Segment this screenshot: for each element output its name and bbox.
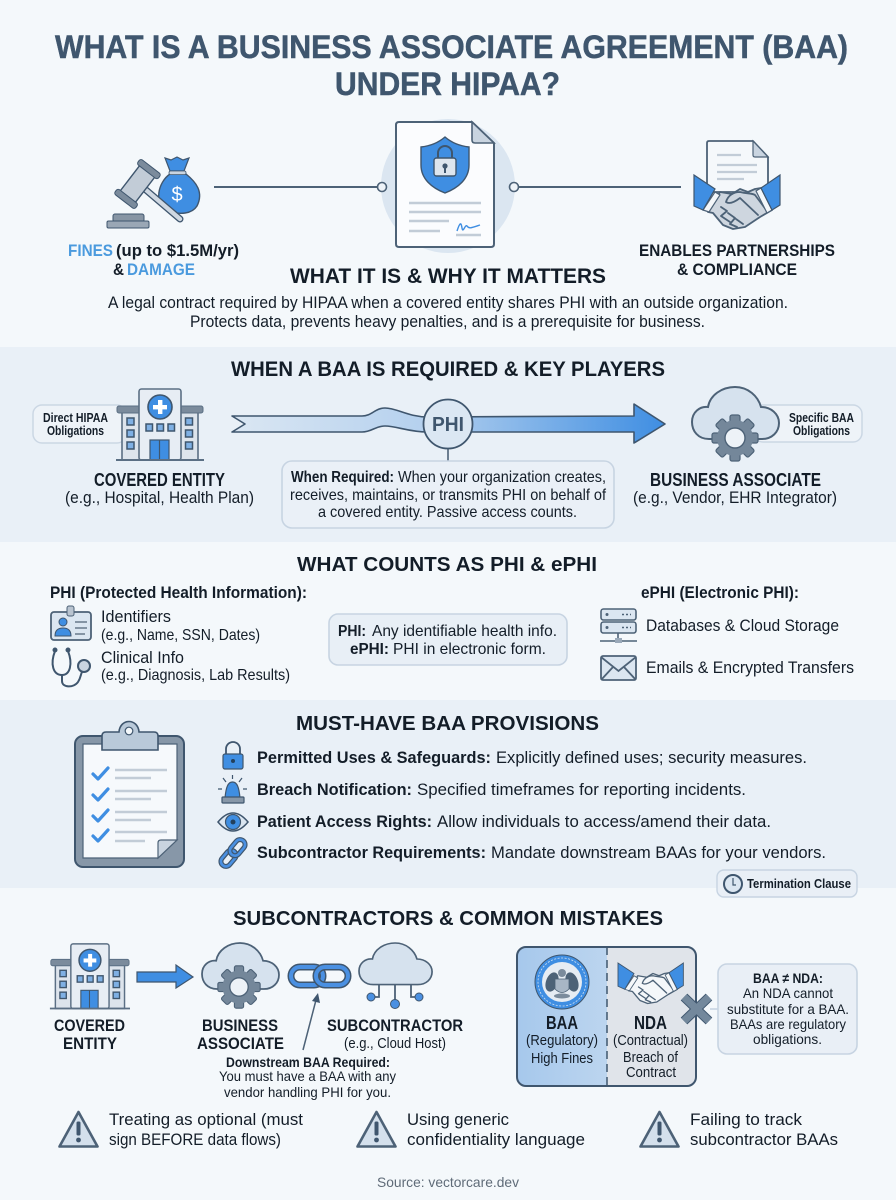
icon: envelope [601,656,636,680]
provision: subcontractor requirements: Subcontractor Requirements: [257,843,486,862]
provision: permitted uses: Permitted Uses & Safeguards: [257,748,491,767]
panel: what counts as PHI and ePHI [50,553,854,686]
icon: gavel and money bag [107,157,200,228]
text: emails: Emails & Encrypted Transfers [646,659,854,677]
arrow: downstream pointer [303,993,320,1050]
label: business associate: (e.g., Vendor, EHR Integrator) [633,488,837,507]
label: business associate [633,470,837,507]
label: business associate: BUSINESS ASSOCIATE [650,470,821,490]
icon: gavel and money bag: $ [172,184,183,206]
label: subcontractor: (e.g., Cloud Host) [344,1036,446,1052]
callout: BAA does not equal NDA: BAAs are regulatory [730,1016,846,1032]
label: fines and damage [68,241,239,279]
icon: PHI node [424,400,472,461]
text: BAA column: (Regulatory) [526,1033,598,1049]
label: covered entity: ENTITY [63,1034,118,1053]
callout: BAA does not equal NDA: BAA ≠ NDA: [753,970,823,986]
label: fines and damage: FINES [68,241,113,260]
text: clinical info: Clinical Info [101,649,184,667]
label: enables partnerships and compliance: ENABLES PARTNERSHIPS [639,241,835,260]
provision: patient access rights: Allow individuals to access/amend their data. [437,812,771,831]
label: enables partnerships and compliance [639,241,835,279]
text: clinical info: (e.g., Diagnosis, Lab Results) [101,667,290,684]
icon: stethoscope [53,648,90,686]
mistake: treating as optional [60,1110,303,1149]
provision: subcontractor requirements [257,843,826,862]
title: UNDER HIPAA? [335,66,560,102]
icon: ID badge [51,606,91,640]
text: NDA column: NDA [634,1012,667,1033]
heading: must-have provisions: MUST-HAVE BAA PROVISIONS [296,712,599,735]
panel: what it is and why it matters [68,119,835,331]
panel: BAA versus NDA comparison [517,947,709,1086]
callout: BAA does not equal NDA [710,964,857,1054]
callout: definitions: ePHI: [350,641,389,658]
label: fines and damage: DAMAGE [127,260,195,279]
provision: breach notification: Breach Notification: [257,780,412,799]
icon: X mark [684,997,709,1021]
provision: patient access rights [257,812,771,831]
provision: subcontractor requirements: Mandate downstream BAAs for your vendors. [491,843,826,862]
callout: when required: receives, maintains, or transmits PHI on behalf of [290,487,607,504]
arrow: PHI flow [232,404,665,443]
provision: patient access rights: Patient Access Rights: [257,812,432,831]
icon: chain link [291,967,348,985]
icon: NDA handshake [618,963,683,1004]
callout: direct HIPAA obligations [33,405,126,443]
panel: must-have BAA provisions [0,700,896,897]
provision: breach notification: Specified timeframes for reporting incidents. [417,780,746,799]
mistake: generic language: Using generic [407,1110,509,1129]
icon: covered entity hospital [50,944,130,1009]
callout: BAA does not equal NDA: obligations. [753,1031,822,1047]
connector: left [214,182,386,192]
callout: specific BAA obligations [754,405,862,442]
icon: alarm beacon [218,775,247,803]
label: covered entity: (e.g., Hospital, Health Plan) [65,488,254,507]
text: identifiers: (e.g., Name, SSN, Dates) [101,627,260,644]
text: downstream BAA required: You must have a BAA with any [219,1068,396,1084]
text: BAA definition: Protects data, prevents heavy penalties, and is a prerequisite for business. [190,312,705,331]
subheading: PHI: PHI (Protected Health Information): [50,583,307,602]
mistake: treating as optional: Treating as optional (must [109,1110,303,1129]
text: BAA column: BAA [546,1012,578,1033]
mistake: generic language: confidentiality language [407,1130,585,1149]
callout: definitions: PHI: [338,623,366,640]
label: business associate: BUSINESS [202,1016,278,1035]
text: BAA definition [108,293,788,331]
text: clinical info [101,649,290,684]
callout: direct HIPAA obligations: Obligations [47,423,104,438]
icon: padlock [223,742,243,769]
icon: hospital [116,389,204,460]
label: subcontractor [327,1016,463,1052]
callout: when required: a covered entity. Passive access counts. [318,504,577,521]
heading: when a BAA is required: WHEN A BAA IS REQUIRED & KEY PLAYERS [231,357,665,381]
icon: business associate cloud and gear [692,387,779,461]
icon: cloud and gear [202,943,279,1008]
mistake: untracked subcontractors [640,1110,838,1149]
mistake: generic language [358,1110,585,1149]
callout: termination clause: Termination Clause [747,877,851,891]
mistake: untracked subcontractors: subcontractor BAAs [690,1130,838,1149]
callout: termination clause [717,870,857,897]
label: covered entity: COVERED ENTITY [94,470,225,490]
source line: Source: vectorcare.dev [377,1174,519,1190]
arrow: covered entity to business associate [137,965,193,988]
icon: BAA document with shield [381,119,515,253]
icon: server [600,609,637,643]
text: BAA column [526,1012,598,1067]
callout: definitions: Any identifiable health info. [372,623,557,640]
panel: subcontractors and common mistakes [50,907,857,1190]
label: subcontractor: SUBCONTRACTOR [327,1016,463,1035]
label: fines and damage: (up to $1.5M/yr) [116,241,239,260]
mistake: untracked subcontractors: Failing to track [690,1110,803,1129]
provision: breach notification [257,780,746,799]
icon: eye [218,813,248,831]
icon: subcontractor cloud network [359,943,432,1008]
provision: permitted uses: Explicitly defined uses; security measures. [496,748,807,767]
callout: when required [282,461,614,528]
connector: right [510,182,681,192]
label: business associate [197,1016,284,1053]
text: NDA column: (Contractual) [613,1033,688,1049]
title: WHAT IS A BUSINESS ASSOCIATE AGREEMENT (BAA) [55,29,848,65]
callout: when required: When Required: [291,469,394,486]
callout: when required: When your organization creates, [398,469,606,486]
label: covered entity: COVERED [54,1016,125,1035]
callout: BAA does not equal NDA: substitute for a BAA. [727,1001,849,1017]
text: downstream BAA required [219,1054,396,1100]
text: BAA definition: A legal contract required by HIPAA when a covered entity shares PHI with an outside organization. [108,293,788,312]
heading: what counts as PHI: WHAT COUNTS AS PHI & ePHI [297,553,597,576]
callout: BAA does not equal NDA: An NDA cannot [743,985,833,1001]
label: covered entity [65,470,254,507]
panel: when a BAA is required and key players [0,347,896,542]
text: NDA column: Contract [626,1065,676,1081]
heading: what it is and why it matters: WHAT IT IS & WHY IT MATTERS [290,265,606,288]
subheading: ePHI: ePHI (Electronic PHI): [641,583,799,602]
label: fines and damage: & [113,260,124,279]
title [55,29,848,102]
text: NDA column: Breach of [623,1050,679,1066]
icon: clipboard checklist [75,722,184,867]
callout: specific BAA obligations: Specific BAA [789,410,854,425]
text: identifiers [101,608,260,644]
label: business associate: ASSOCIATE [197,1034,284,1053]
callout: direct HIPAA obligations: Direct HIPAA [43,410,108,425]
text: downstream BAA required: Downstream BAA Required: [226,1054,390,1070]
label: enables partnerships and compliance: & COMPLIANCE [677,260,797,279]
mistake: treating as optional: sign BEFORE data flows) [109,1130,281,1149]
text: NDA column [613,1012,688,1081]
text: databases: Databases & Cloud Storage [646,617,839,635]
icon: contract with handshake [694,141,780,229]
icon: PHI node: PHI [432,414,464,436]
callout: definitions [329,614,567,665]
heading: subcontractors: SUBCONTRACTORS & COMMON MISTAKES [233,907,663,930]
text: downstream BAA required: vendor handling PHI for you. [224,1084,391,1100]
text: BAA column: High Fines [531,1051,593,1067]
icon: regulatory seal [535,955,589,1009]
icon: tilted chain link [219,838,247,868]
text: identifiers: Identifiers [101,608,171,626]
callout: specific BAA obligations: Obligations [793,423,850,438]
label: covered entity [54,1016,125,1053]
callout: definitions: PHI in electronic form. [393,641,546,658]
provision: permitted uses [257,748,807,767]
